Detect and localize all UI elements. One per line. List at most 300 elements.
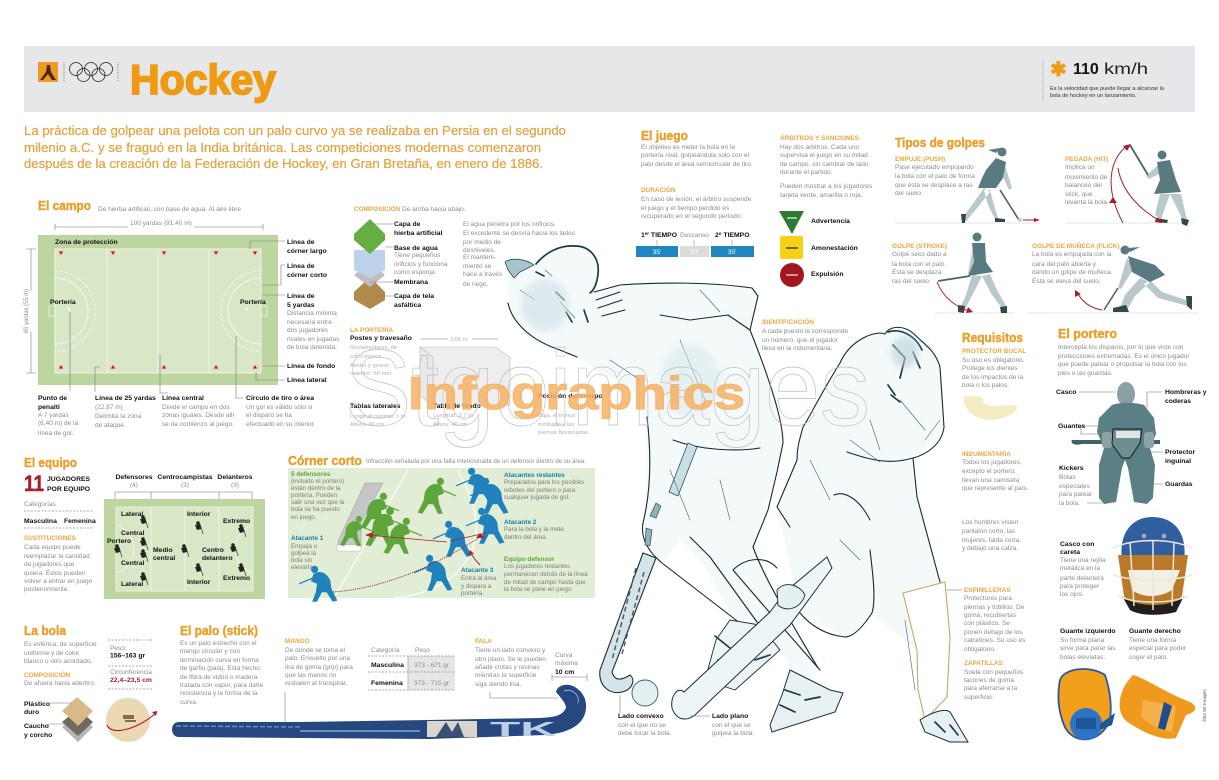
card: Amonestación — [780, 236, 858, 259]
árbitros text: ÁRBITROS Y SANCIONES — [780, 133, 860, 142]
composition labels: Membrana — [394, 279, 428, 286]
árbitros text: tarjeta verde, amarilla o roja. — [780, 192, 863, 199]
formation field: Interior — [187, 511, 211, 518]
curve measure: máxima — [555, 660, 578, 667]
hockey field diagram: Portería — [50, 299, 76, 306]
left glove: bolas elevadas. — [1060, 654, 1105, 661]
card: Expulsión — [780, 263, 843, 287]
stick description: tratada con vapor, para darle — [180, 682, 263, 689]
ball stats: 22,4–23,5 cm — [110, 677, 152, 684]
match time bars: 1 — [641, 232, 645, 239]
formation field: Extremo — [223, 575, 250, 582]
formation field — [104, 499, 265, 599]
golpe: stroke — [892, 232, 1015, 313]
sustituciones: volver a entrar en juego — [24, 578, 93, 585]
corner texts: Los jugadores restantes — [504, 563, 570, 570]
right glove: coger el palo. — [1129, 654, 1168, 661]
formation field: Central — [121, 530, 145, 537]
formation field: Central — [121, 560, 145, 567]
game text: En caso de lesión, el árbitro suspende — [641, 196, 752, 203]
ball stats — [108, 640, 152, 689]
intro text: milenio a.C. y se fraguó en la India británica. Las competiciones modernas comenzaron — [24, 140, 541, 155]
dimension: width — [55, 220, 263, 230]
golpe: pegada: balanceo del — [1065, 182, 1102, 189]
golpe: flick: Ésta se eleva del suelo. — [1032, 276, 1101, 285]
field labels right: Línea de fondo — [287, 363, 335, 370]
goal diagram — [420, 335, 510, 405]
mango text: tira de goma (grip) para — [285, 664, 353, 671]
ball text: y corcho — [24, 732, 52, 739]
ball text: De afuera hacia adentro. — [24, 680, 96, 687]
formation field: Medio — [153, 547, 173, 554]
card: Expulsión: Expulsión — [811, 271, 843, 278]
ball text: Plástico — [24, 701, 50, 708]
game text: El objetivo es meter la bola en la — [641, 144, 735, 151]
helmet text: los ojos. — [1060, 591, 1084, 598]
drainage text: desniveles. — [463, 247, 496, 254]
match time bars — [636, 231, 754, 257]
corner texts: bola se ha puesto — [291, 506, 340, 513]
goalkeeper labels: coderas — [1165, 398, 1191, 405]
curve measure: Curva — [555, 652, 573, 659]
golpe: flick: La bola es empujada con la — [1032, 251, 1112, 258]
composition labels: como esponja. — [394, 269, 436, 276]
corner texts: Para la bola y la mete — [504, 526, 564, 533]
heading: El portero: El portero — [1058, 326, 1117, 341]
goalkeeper labels: Guardas — [1165, 481, 1193, 488]
card: Advertencia: Advertencia — [811, 218, 850, 225]
heading: El juego: El juego — [641, 128, 688, 143]
goal text: Longitud: 3,7 m — [433, 413, 473, 419]
speed callout: km/h — [1104, 61, 1148, 78]
left glove: Su forma plana — [1060, 637, 1104, 644]
hockey field diagram: Portería — [240, 299, 266, 306]
caption: lado plano: Lado plano — [712, 713, 748, 720]
golpe: empuje: la bola con el palo de forma — [895, 173, 975, 180]
title: Hockey — [130, 56, 277, 103]
position headers — [115, 474, 253, 505]
field labels right: córner corto — [287, 272, 327, 279]
speed callout: 110 — [1073, 61, 1099, 78]
indumentaria: que represente al país. — [962, 485, 1029, 492]
corner texts: portería. — [461, 590, 484, 597]
header band — [24, 46, 1195, 112]
game text: recuperado en el segundo período. — [641, 213, 742, 220]
card: Advertencia — [779, 211, 850, 234]
golpe: empuje: que ésta se desplace a ras — [895, 182, 973, 189]
corner texts: Atacante 2 — [504, 519, 537, 526]
formation field: Centro — [202, 547, 224, 554]
field labels bottom: penalti — [38, 404, 60, 411]
helmet text: Tiene una rejilla — [1060, 557, 1106, 564]
ball text: COMPOSICIÓN — [24, 670, 71, 679]
identificación text: lleva en la indumentaria. — [762, 345, 833, 352]
indumentaria: pantalón corto; las — [962, 528, 1016, 535]
zapatillas: tacones de goma — [964, 677, 1014, 684]
caption: lado convexo: debe tocar la bola. — [618, 730, 672, 737]
goal text: Ancho y grosor — [350, 363, 389, 369]
field labels bottom: de ataque. — [95, 422, 126, 429]
goal text: Tablas laterales — [350, 403, 401, 410]
goalkeeper text: Intercepta los disparos, por lo que viste con — [1058, 344, 1184, 351]
espinilleras: con plástico. Se — [964, 620, 1010, 627]
identificación text — [762, 317, 848, 352]
golpe: stroke: Ésta se desplaza — [892, 267, 942, 276]
field labels right: rivales en jugadas — [287, 336, 340, 343]
match time bars: 35' — [728, 249, 736, 256]
helmet text: para proteger — [1060, 583, 1100, 590]
goal text: LA PORTERÍA — [350, 325, 393, 334]
right glove: especial para poder — [1129, 645, 1187, 652]
corner subtitle: Infracción señalada por una falta intencionada de un defensor dentro de su área. — [366, 458, 586, 465]
speed callout: Es la velocidad que puede llegar a alcanzar la — [1050, 86, 1165, 92]
panel: El campo — [23, 198, 340, 437]
match time bars: Descanso — [680, 232, 709, 239]
panel: composición — [354, 204, 576, 309]
pala text: otro plano. Se le pueden — [475, 656, 546, 663]
field labels right: Distancia mínima — [287, 310, 337, 317]
golpe: pegada: stick, que — [1065, 191, 1093, 198]
corner texts: Empuja o — [291, 543, 318, 550]
zapatillas: superficie. — [964, 694, 994, 701]
icon: olympic rings — [64, 62, 118, 82]
espinilleras: piernas y tobillos. De — [964, 604, 1025, 611]
espinilleras: obligatorio. — [964, 646, 996, 653]
árbitros text: Pueden mostrar a los jugadores — [780, 183, 873, 190]
indumentaria: mujeres, falda corta, — [962, 537, 1021, 544]
composition heading: COMPOSICIÓN — [354, 204, 401, 213]
drainage text: El manteni- — [463, 254, 496, 261]
panel: El equipo — [24, 455, 265, 599]
field labels right: de bola detenida. — [287, 344, 337, 351]
intro text — [24, 123, 566, 171]
right glove: Guante derecho — [1129, 628, 1181, 635]
helmet text: metálica en la — [1060, 565, 1100, 572]
protector bucal: PROTECTOR BUCAL — [962, 348, 1026, 355]
match time bars: TIEMPO — [722, 232, 749, 239]
golpe: flick: cara del palo abierta y — [1032, 261, 1097, 268]
goal text: inclinado y las — [538, 422, 575, 428]
match time bars: o — [719, 231, 722, 236]
stick illustration — [172, 685, 586, 741]
ball stats: Peso: — [110, 645, 127, 652]
helmet text: parte delantera — [1060, 575, 1104, 582]
drainage text: de riego. — [463, 281, 488, 288]
corner texts: están dentro de la — [291, 485, 341, 492]
field labels bottom: (22,87 m) — [95, 404, 123, 411]
corner texts: permanecen detrás de la línea — [504, 571, 588, 578]
zapatillas — [964, 660, 1024, 701]
panel: Tipos de golpes — [892, 135, 1198, 313]
corner texts — [291, 471, 588, 597]
stick description: terminación curva en forma — [180, 657, 259, 664]
espinilleras: ESPINILLERAS — [964, 587, 1011, 594]
field labels bottom: Divide el campo en dos — [162, 404, 230, 411]
position headers: Centrocampistas — [157, 474, 213, 481]
golpe: empuje: del suelo. — [895, 190, 923, 197]
helmet text: careta — [1060, 549, 1080, 556]
field subtitle: De hierba artificial, con base de agua. Al aire libre — [98, 206, 241, 213]
heading: Córner corto: Córner corto — [288, 453, 362, 468]
heading: Tipos de golpes: Tipos de golpes — [895, 135, 985, 150]
espinilleras — [947, 587, 1026, 653]
intro text: La práctica de golpear una pelota con un palo curvo ya se realizaba en Persia en el segundo — [24, 123, 566, 138]
hockey field diagram — [38, 235, 285, 398]
árbitros text: Hay dos árbitros. Cada uno — [780, 144, 860, 151]
mango text: que las manos no — [285, 672, 337, 679]
sustituciones: reemplazar la cantidad — [24, 553, 90, 560]
corner texts: Atacantes restantes — [504, 472, 565, 479]
goalkeeper illustration — [1071, 382, 1160, 504]
weight table: Peso — [415, 647, 430, 654]
field labels right: necesaria entre — [287, 319, 332, 326]
composition heading — [354, 204, 466, 213]
heading: Requisitos: Requisitos — [962, 330, 1023, 345]
goalkeeper text: protecciones extremadas. Es el único jugador — [1058, 353, 1190, 360]
golpe: empuje: EMPUJE (PUSH) — [895, 156, 945, 163]
indumentaria: Los hombres visten — [962, 519, 1019, 526]
indumentaria: llevan una camiseta — [962, 477, 1020, 484]
espinilleras: ponen debajo de los — [964, 629, 1023, 636]
árbitros text: de campo, sin cambiar de lado — [780, 161, 869, 168]
formation field: delantero — [202, 555, 233, 562]
golpe: stroke: Golpe seco dado a — [892, 251, 947, 258]
protector bucal: Su uso es obligatorio. — [962, 357, 1025, 364]
pala text: mientras la superficie — [475, 672, 537, 679]
golpe: pegada — [1065, 144, 1193, 226]
field labels bottom: zonas iguales. Desde allí — [162, 412, 234, 419]
composition labels — [394, 221, 448, 309]
stick description: de fibra de vidrio o madera — [180, 674, 258, 681]
watermark: Stgoimages — [345, 327, 870, 448]
field labels right: dos jugadores — [287, 327, 329, 334]
stick illustration: TK — [490, 719, 557, 741]
illustration: left player line art — [505, 245, 820, 706]
panel: la portería — [350, 325, 603, 436]
árbitros text: durante el partido. — [780, 169, 833, 176]
sustituciones — [24, 535, 93, 593]
field labels bottom: Línea de 25 yardas — [95, 395, 156, 402]
field labels bottom: (6,40 m) de la — [38, 420, 78, 427]
golpe: empuje: Pase ejecutado empujando — [895, 164, 974, 171]
goalkeeper labels: Protector — [1165, 449, 1196, 456]
left glove — [1058, 628, 1116, 740]
pala text: Tiene un lado convexo y — [475, 647, 546, 654]
weight table — [368, 647, 455, 690]
indumentaria: y debajo una calza. — [962, 545, 1018, 552]
composition labels: Capa de tela — [394, 293, 434, 300]
field labels bottom: Punto de — [38, 395, 67, 402]
identificación text: IDENTIFICACIÓN — [762, 317, 814, 326]
drainage text: hace a través — [463, 271, 503, 278]
composition labels: Tiene pequeños — [394, 252, 441, 259]
speed callout: ✱ — [1050, 59, 1067, 81]
ball stats: Circunferencia — [110, 669, 152, 676]
corner texts: Equipo defensor — [504, 556, 555, 563]
caption: lado convexo: Lado convexo — [618, 713, 664, 720]
corner texts: bola sin — [291, 557, 313, 564]
sustituciones: Cada equipo puede — [24, 544, 81, 551]
ball text — [24, 641, 97, 739]
weight table: Femenina — [371, 680, 403, 687]
field labels bottom: Círculo de tiro o área — [246, 395, 314, 402]
field labels bottom: se da comienzo al juego. — [162, 421, 234, 428]
curve measure — [552, 652, 587, 681]
identificación text: A cada puesto le corresponde — [762, 328, 848, 335]
stick description: curva. — [180, 699, 198, 706]
sustituciones: de jugadores que — [24, 561, 75, 568]
stick description: Es un palo estrecho con el — [180, 640, 257, 647]
goal text: máximo: 50 mm — [350, 371, 391, 377]
panel: El palo — [172, 623, 587, 741]
pala text — [475, 638, 558, 698]
match time bars: 35' — [653, 249, 661, 256]
curve measure: 10 cm — [555, 669, 574, 676]
corner texts: la bola se pone en juego. — [504, 586, 573, 593]
goalkeeper labels: inguinal — [1165, 458, 1191, 465]
protector bucal — [962, 348, 1026, 420]
dimension: height: 60 yardas (55 m) — [23, 289, 30, 333]
position headers: Defensores — [115, 474, 153, 481]
helmet text: Casco con — [1060, 541, 1094, 548]
caption: lado plano: golpea la bola. — [712, 730, 754, 737]
field labels bottom: efectuado en su interior. — [246, 421, 316, 428]
position headers: (3) — [181, 482, 189, 489]
goal text: Altura: 46 cm — [350, 422, 384, 428]
speed callout: bola de hockey en un lanzamiento. — [1050, 93, 1137, 99]
pala text: PALA — [475, 638, 492, 645]
corner texts: (incluido el portero) — [291, 478, 344, 485]
goalkeeper labels: Casco — [1056, 389, 1076, 396]
formation field: Portero — [107, 538, 131, 545]
corner texts: Preparados para los posibles — [504, 479, 584, 486]
golpe: stroke: ras del suelo. — [892, 278, 931, 285]
golpe: stroke: GOLPE (STROKE) — [892, 243, 947, 250]
golpe: empuje — [895, 148, 1040, 223]
goal text: Altura: 46 cm — [433, 422, 467, 428]
goal text: Rectangulares, de — [350, 345, 397, 351]
number of players — [24, 471, 91, 496]
corner texts: Atacante 1 — [291, 535, 324, 542]
stick description: de garfio (pala). Está hecho — [180, 665, 260, 672]
golpe: pegada: levanta la bola. — [1065, 199, 1109, 206]
ball text: uniforme y de color — [24, 650, 80, 657]
corner diagram — [288, 468, 595, 602]
sustituciones: SUSTITUCIONES — [24, 535, 77, 542]
game text: palo desde el área semicircular de tiro. — [641, 161, 753, 168]
corner texts: portería. Pueden — [291, 492, 338, 499]
composition labels: Base de agua — [394, 245, 438, 252]
goalkeeper labels: Guantes — [1058, 423, 1085, 430]
espinilleras: calcetines. Su uso es — [964, 637, 1026, 644]
field labels right: Línea de — [287, 293, 315, 300]
caption: lado convexo: con el que no se — [618, 722, 666, 729]
espinilleras: goma, recubiertas — [964, 612, 1017, 619]
intro text: después de la creación de la Federación de Hockey, en Gran Bretaña, en enero de 1886. — [24, 156, 543, 171]
drainage text: El excedente se desvía hacia los lados — [463, 230, 576, 237]
goal text: Tabla de fondo — [433, 403, 481, 410]
goal diagram: 3,66 m — [450, 337, 468, 343]
zapatillas: para aferrarse a la — [964, 685, 1017, 692]
ball illustration — [106, 698, 157, 742]
composition labels: hierba artificial — [394, 230, 442, 237]
goal text: Postes y travesaño — [350, 335, 412, 342]
formation field: Lateral — [121, 581, 143, 588]
caption: lado plano — [690, 713, 754, 737]
dimension: height — [23, 249, 36, 373]
indumentaria: excepto el portero, — [962, 468, 1016, 475]
formation field: central — [153, 555, 175, 562]
árbitros text: supervisa el juego en su mitad — [780, 152, 868, 159]
layered turf stack — [354, 219, 393, 309]
goal text: Posición del cuerpo — [538, 393, 603, 400]
indumentaria: Todos los jugadores, — [962, 459, 1022, 466]
goal text — [350, 325, 603, 436]
field labels right: 5 yardas — [287, 302, 315, 309]
position headers: (4) — [130, 482, 138, 489]
caption: lado convexo — [618, 695, 672, 737]
match time bars: er — [645, 231, 649, 236]
ball text: blanco u otro acordado. — [24, 658, 92, 665]
zapatillas: ZAPATILLAS — [964, 660, 1004, 667]
protector bucal: bola o los palos. — [962, 382, 1009, 389]
mango text: resbalen al transpirar. — [285, 680, 348, 687]
goalkeeper text: pies o las guardas. — [1058, 370, 1113, 377]
weight table: 373 - 715 gr — [414, 680, 450, 687]
goalkeeper labels: para patear — [1059, 491, 1093, 498]
composition labels: orificios y funciona — [394, 261, 448, 268]
helmet photo — [1113, 517, 1192, 615]
field labels bottom: el disparo se ha — [246, 412, 292, 419]
composition labels: asfáltica — [394, 302, 421, 309]
position headers: (3) — [231, 482, 239, 489]
right glove — [1120, 628, 1195, 739]
number of players: 11 — [24, 471, 44, 496]
indumentaria: INDUMENTARIA — [962, 451, 1011, 458]
match time bars: 10' — [690, 249, 698, 256]
pala text: siga siendo lisa. — [475, 681, 521, 688]
goalkeeper text: que puede patear o propulsar la bola con los — [1058, 361, 1187, 368]
heading: El equipo: El equipo — [24, 455, 77, 470]
corner texts: 5 defensores — [291, 471, 331, 478]
golpe: pegada: PEGADA (HIT) — [1065, 156, 1108, 163]
goal text: Baja, el tronco — [538, 413, 575, 419]
drainage text: miento se — [463, 263, 492, 270]
golpe: flick — [1028, 241, 1198, 313]
corner texts: y dispara a — [461, 583, 492, 590]
caption: lado plano: con el que se — [712, 722, 751, 729]
ball layers — [48, 697, 93, 742]
goal text: color blanco. — [350, 354, 383, 360]
golpe: flick: GOLPE DE MUÑECA (FLICK) — [1032, 241, 1119, 250]
field labels right: Línea de — [287, 263, 315, 270]
goalkeeper labels: Botas — [1059, 474, 1076, 481]
illustration: right player line art — [672, 327, 968, 742]
goalkeeper labels: especiales — [1059, 483, 1090, 490]
image credit: ©64 90 Images — [1201, 689, 1208, 722]
goal text: Longitud mínima: 1 m — [350, 414, 406, 420]
field labels right — [287, 239, 340, 384]
panel: El juego — [636, 128, 873, 352]
ball text: duro — [24, 709, 39, 716]
corner texts: golpea la — [291, 550, 317, 557]
field labels bottom: línea de gol. — [38, 430, 74, 437]
drainage text: El agua penetra por los orificios. — [463, 221, 556, 228]
field labels bottom — [38, 395, 316, 437]
categories: Categorías — [24, 501, 57, 508]
goal text: piernas flexionadas. — [538, 430, 590, 436]
formation field: Lateral — [121, 511, 143, 518]
